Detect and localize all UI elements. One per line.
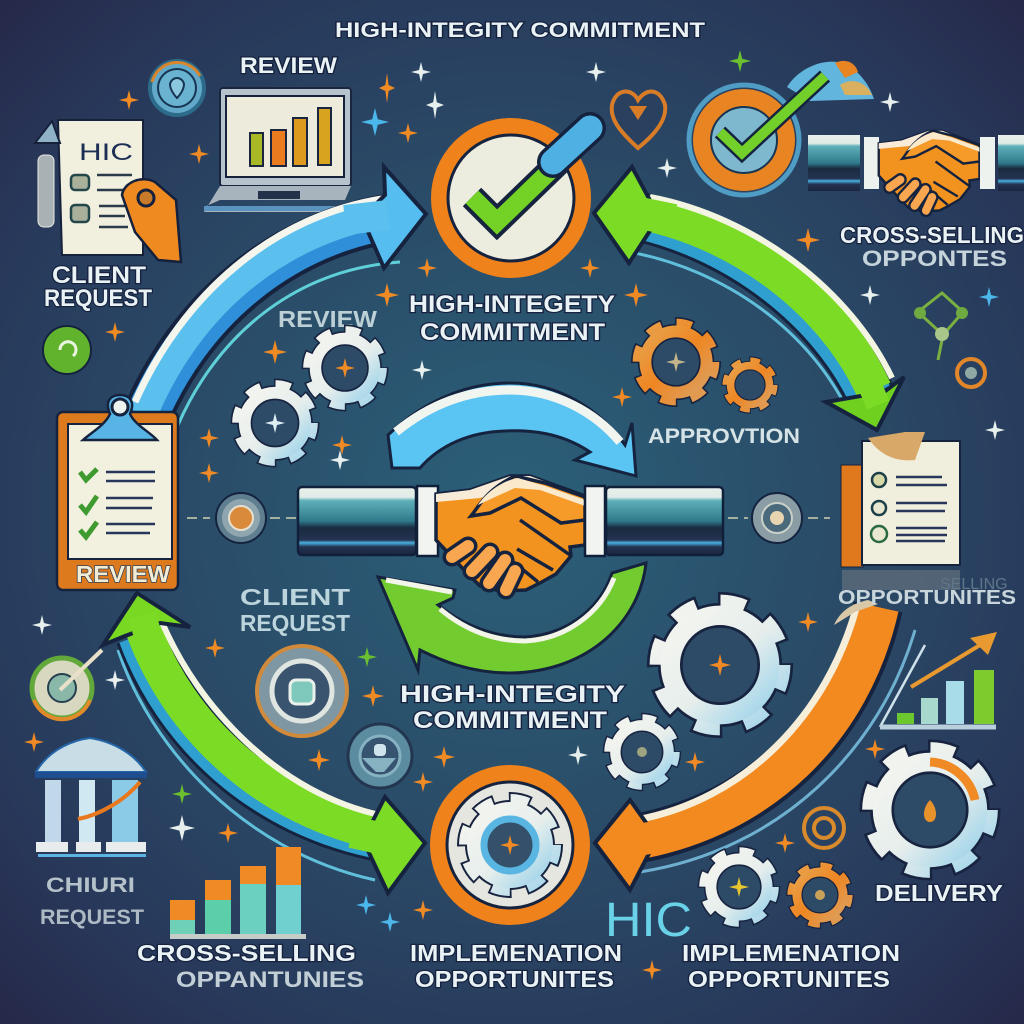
label: implementation right [682, 940, 900, 992]
label: high-integrity commitment lower: HIGH-INTEGITY [400, 681, 625, 708]
arrow: central green arc [378, 563, 646, 673]
label: high-integrity commitment lower [400, 681, 625, 734]
label: implementation center: OPPORTUNITES [415, 966, 614, 992]
icon: laptop chart [204, 88, 352, 212]
icon: checklist right [841, 432, 960, 567]
icon: small gear center [609, 719, 675, 785]
arrow: green top-right [594, 167, 904, 430]
label: high-integrity commitment upper [409, 291, 615, 346]
label: cross-selling bottom [137, 940, 364, 992]
icon: handshake top right [808, 131, 1024, 211]
label: cross-selling top right: OPPONTES [862, 246, 1007, 271]
label: high-integrity commitment lower: COMMITMENT [413, 707, 607, 734]
icon: HIC document with hand [35, 120, 181, 262]
icon: large badge [257, 646, 347, 736]
icon: gears upper right [638, 324, 774, 409]
label: hic: HIC [605, 894, 692, 947]
icon: implementation gear circle [438, 773, 582, 917]
icon: temple [35, 738, 147, 857]
label: implementation center: IMPLEMENATION [410, 940, 622, 966]
arrow: blue top-left [135, 167, 426, 425]
label: cross-selling top right: CROSS-SELLING [840, 222, 1024, 248]
icon: gears upper left [237, 331, 382, 461]
icon: bar chart bottom [170, 847, 306, 939]
label: chiuri request: CHIURI [46, 874, 135, 897]
label: chiuri request [40, 874, 144, 929]
icon: network [914, 293, 985, 387]
label: client request top: REQUEST [44, 285, 152, 312]
label: opportunities right: OPPORTUNITES [838, 587, 1016, 609]
icon: clipboard: REVIEW [76, 561, 170, 587]
icon: medium badge [348, 724, 412, 788]
icon: HIC document with hand: HIC [79, 139, 133, 166]
icon: small node left [187, 493, 296, 543]
label: chiuri request: REQUEST [40, 906, 144, 929]
label: delivery: DELIVERY [875, 880, 1003, 906]
label: client request top [44, 262, 152, 312]
icon: small node right [728, 493, 830, 543]
icon: target pin [32, 650, 102, 719]
label: cross-selling top right [840, 222, 1024, 271]
icon: heart [612, 92, 665, 148]
label: opportunities right: SELLING [940, 576, 1008, 593]
icon: lower gears pair [704, 852, 849, 924]
arrow: central blue arc [388, 383, 636, 476]
label: implementation center [410, 940, 622, 992]
label: client request middle: REQUEST [240, 610, 350, 636]
icon: top-left badge [150, 61, 204, 115]
label: client request middle [240, 584, 350, 636]
label: cross-selling bottom: CROSS-SELLING [137, 940, 356, 966]
label: approval: APPROVTION [648, 425, 800, 448]
label: high-integrity commitment upper: COMMITMENT [420, 319, 605, 346]
icon: central commitment circle [439, 126, 590, 270]
label: client request middle: CLIENT [240, 584, 350, 610]
arrow: orange bottom-right [595, 600, 915, 890]
label: client request top: CLIENT [52, 262, 146, 289]
icon: green badge [43, 326, 91, 374]
label: opportunities right [838, 570, 1016, 609]
label: cross-selling bottom: OPPANTUNIES [176, 967, 364, 992]
icon: growth chart right [880, 632, 997, 727]
label: implementation right: OPPORTUNITES [688, 966, 890, 992]
icon: spiral badge [804, 808, 844, 848]
label: review top: REVIEW [240, 53, 337, 78]
label: high-integrity commitment upper: HIGH-INTEGETY [409, 291, 615, 318]
icon: central handshake [298, 476, 723, 591]
label: review middle: REVIEW [278, 306, 377, 332]
label: implementation right: IMPLEMENATION [682, 940, 900, 966]
icon: delivery gear [870, 750, 990, 870]
arrow: green bottom-left [103, 593, 425, 893]
title: HIGH-INTEGITY COMMITMENT [335, 19, 705, 42]
icon: check target [689, 61, 874, 195]
icon: large gear [658, 603, 782, 727]
icon: clipboard [57, 395, 178, 590]
